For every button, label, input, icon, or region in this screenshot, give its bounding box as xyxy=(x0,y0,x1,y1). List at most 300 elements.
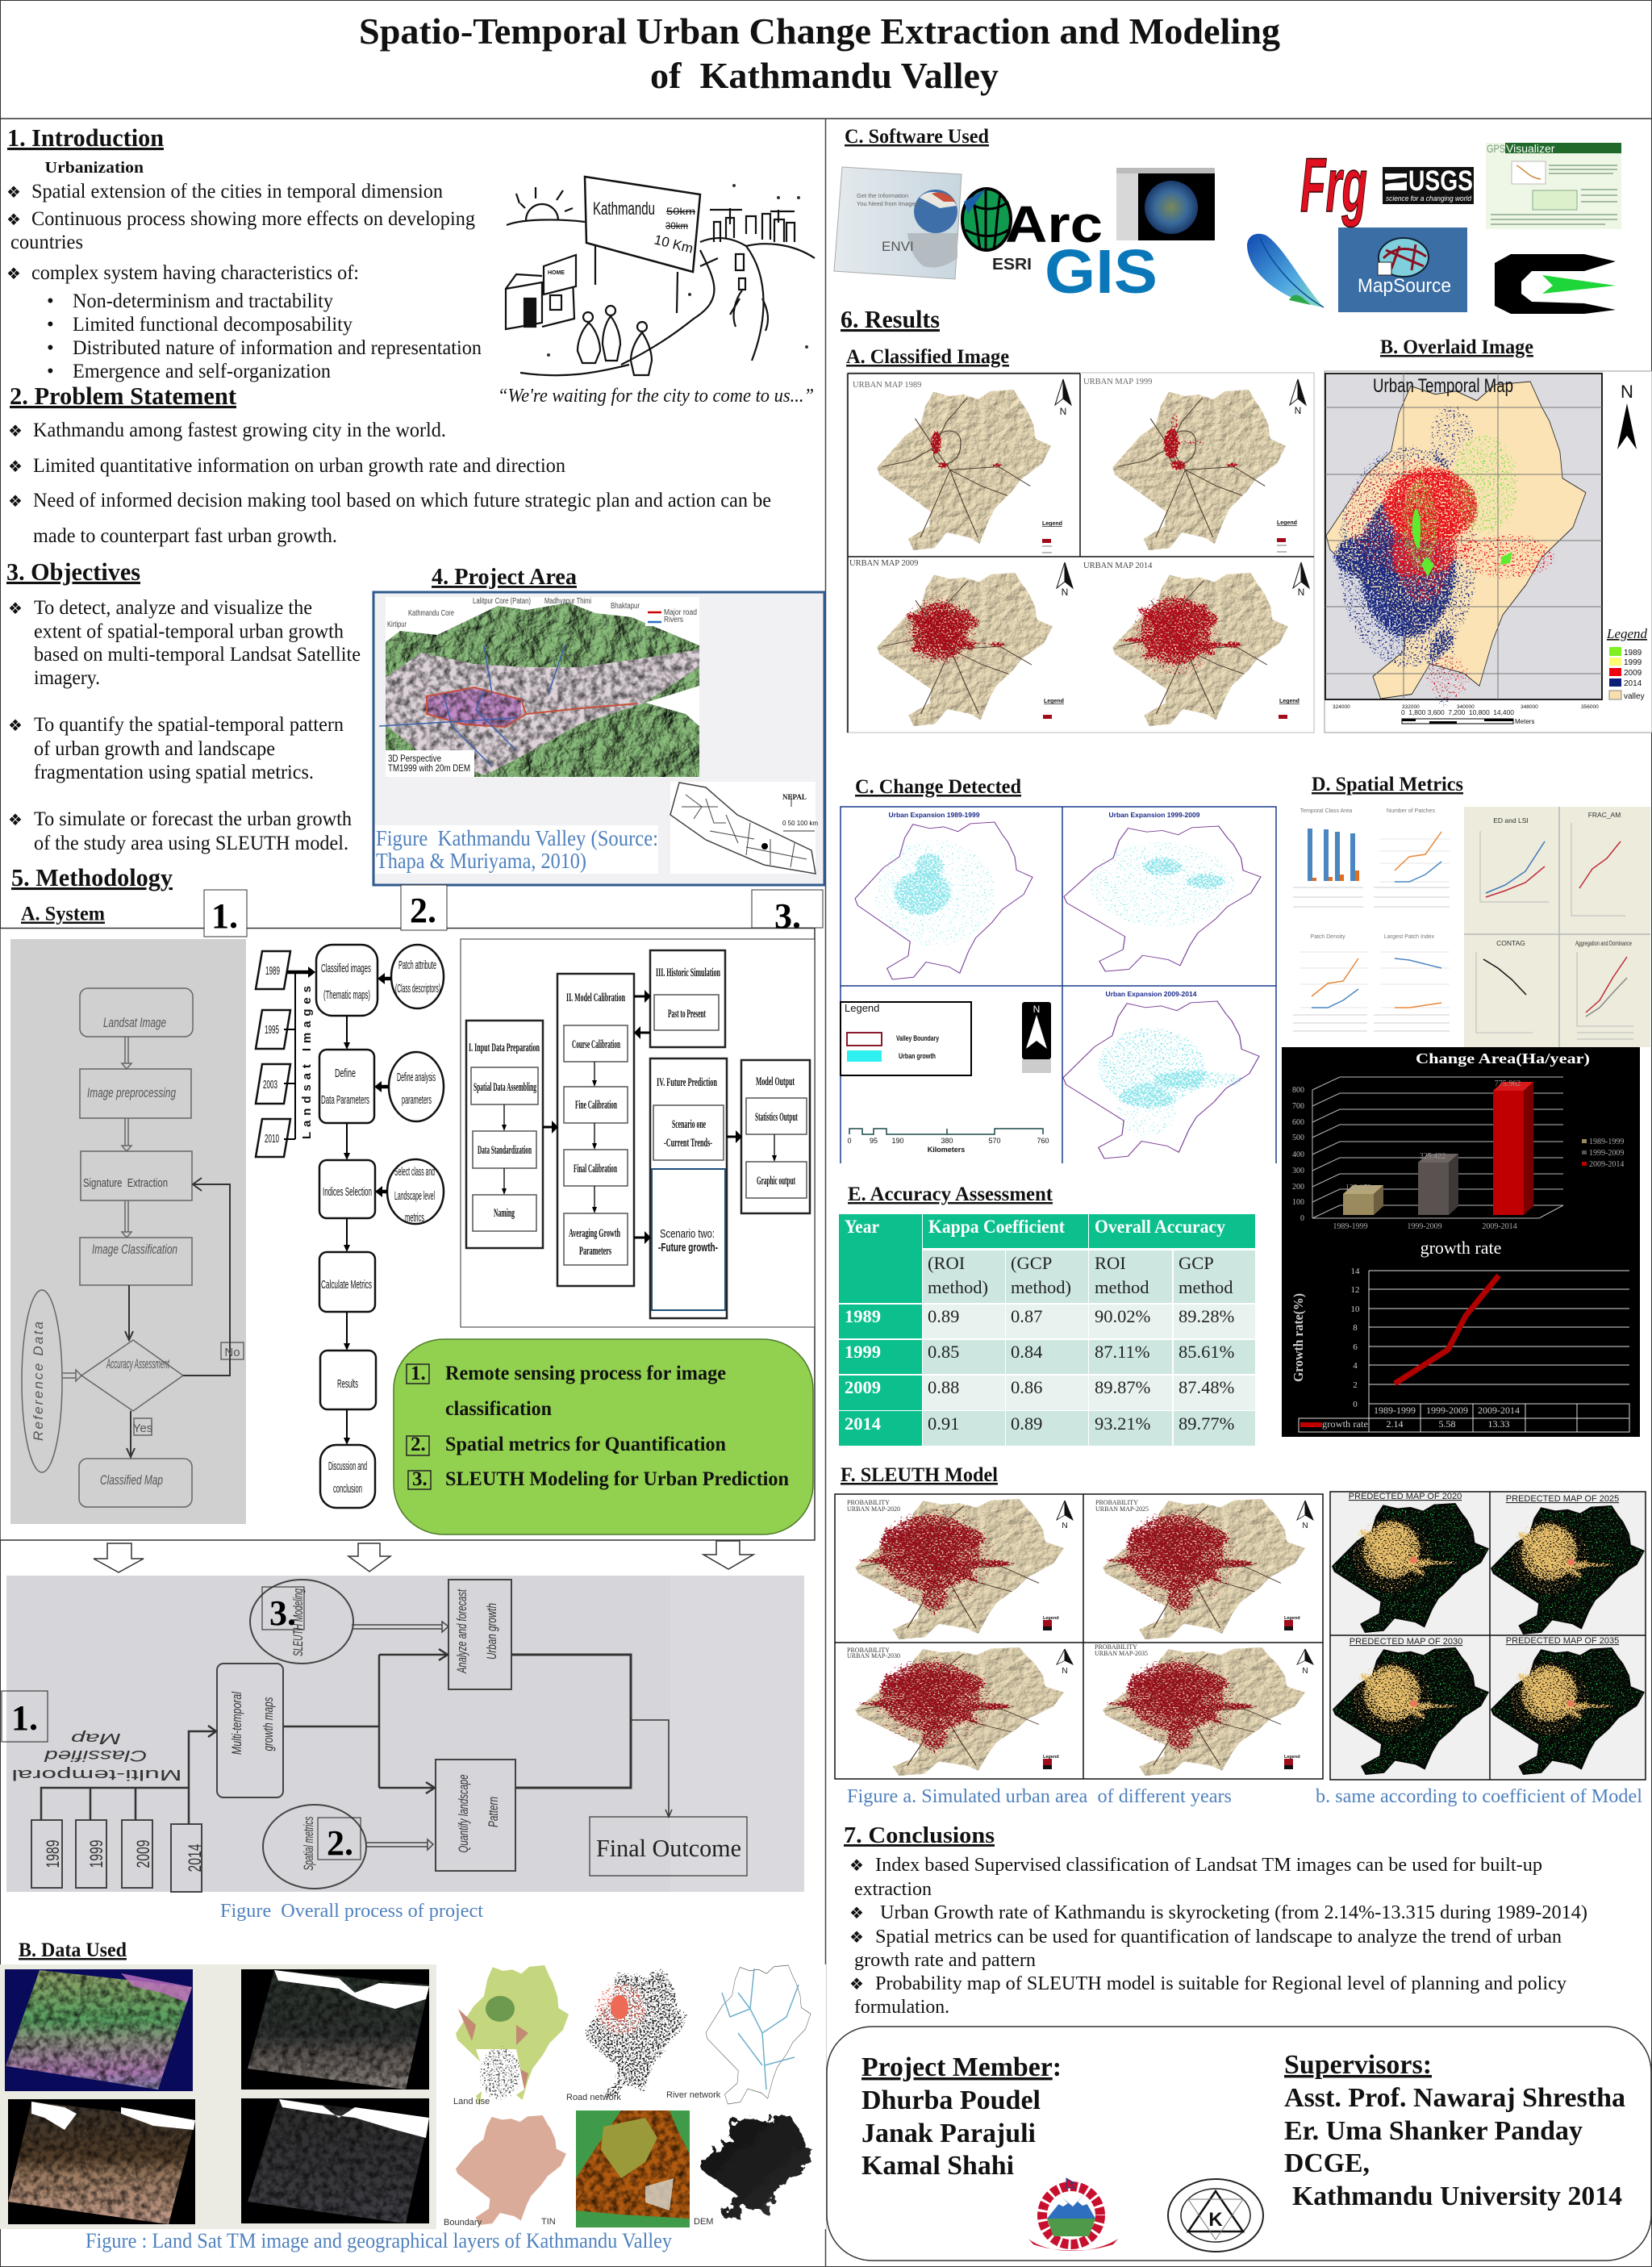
logo: ArcGIS: ESRI xyxy=(992,256,1032,273)
legend: change area: 1999-2009 xyxy=(1589,1149,1624,1158)
map: expansion 1999-2009: Urban Expansion 1999-2009 xyxy=(1109,811,1200,819)
callout: three methods: Remote sensing process for image xyxy=(445,1363,726,1384)
panel: project area frame xyxy=(373,592,824,885)
map: urban 2014: Legend xyxy=(1279,699,1299,704)
table: accuracy assessment: Year xyxy=(845,1217,879,1237)
map: urban 1989: URBAN MAP 1989 xyxy=(853,381,921,390)
map: probability 2020: URBAN MAP-2020 xyxy=(847,1505,900,1513)
scale bar: 348000 xyxy=(1521,704,1538,710)
data table: growth rate: growth rate xyxy=(1322,1418,1368,1430)
icon: Kathmandu University seal: K xyxy=(1208,2209,1223,2231)
flowchart: SLEUTH modeling: II. Model Calibration xyxy=(566,992,625,1004)
title banner xyxy=(0,10,1652,119)
section: project area xyxy=(373,565,824,885)
map: urban 1989: Legend xyxy=(1042,521,1062,527)
flowchart: spatial metrics: Discussion and xyxy=(328,1459,367,1473)
numbered marker boxes: 3. xyxy=(774,896,801,936)
flowchart: image classification: Image Classification xyxy=(92,1242,177,1257)
map: boundary xyxy=(444,2115,566,2227)
logo: GPS Visualizer page xyxy=(1486,142,1621,229)
logo: USGS xyxy=(1383,165,1474,204)
scale bar: kilometers: 95 xyxy=(870,1137,878,1145)
callout: three methods: Spatial metrics for Quantification xyxy=(445,1434,726,1455)
legend: overlay years: valley xyxy=(1624,692,1645,701)
chart: change area: 2009-2014 xyxy=(1482,1222,1517,1231)
introduction bullets: • xyxy=(47,290,54,312)
problem statement bullets: Limited quantitative information on urban growth rate and direction xyxy=(33,455,565,477)
bar: 2009-2014: 775.962 xyxy=(1495,1079,1521,1088)
conclusions bullets: ❖ xyxy=(849,1903,864,1923)
image: 3D valley perspective: Major road xyxy=(664,608,697,617)
flowchart: spatial metrics: Select class and xyxy=(394,1165,435,1179)
heading: change detected: C. Change Detected xyxy=(855,776,1021,798)
legend: overlay years: 2009 xyxy=(1624,669,1642,678)
objectives bullets: extent of spatial-temporal urban growth xyxy=(34,621,344,642)
flowchart: spatial metrics: Indices Selection xyxy=(323,1185,372,1199)
image: 3D valley perspective xyxy=(379,597,699,777)
flowchart: image classification: No xyxy=(224,1346,240,1359)
map: urban 1999 xyxy=(1083,378,1306,552)
panel: change detected maps xyxy=(841,807,1276,1163)
flowchart: image classification xyxy=(10,939,246,1524)
map: urban 1989 xyxy=(853,379,1071,553)
objectives bullets: based on multi-temporal Landsat Satellite xyxy=(34,644,361,666)
callout: three methods: SLEUTH Modeling for Urban Prediction xyxy=(445,1468,789,1490)
table: accuracy assessment: 0.88 xyxy=(928,1377,959,1397)
legend: overlay years: 1989 xyxy=(1624,649,1642,658)
chart: change area: 100 xyxy=(1292,1198,1304,1207)
diagram: overall process: 1999 xyxy=(86,1839,106,1868)
data table: growth rate: 2009-2014 xyxy=(1478,1405,1520,1416)
flowchart: spatial metrics: 2003 xyxy=(263,1078,277,1092)
map: urban 1989: N xyxy=(1060,406,1066,417)
table: accuracy assessment: 87.11% xyxy=(1095,1342,1150,1362)
logo: GPS Visualizer page: GPS xyxy=(1487,142,1505,155)
introduction bullets: Limited functional decomposability xyxy=(73,314,353,336)
scale bar: 356000 xyxy=(1581,704,1599,710)
flowchart: SLEUTH modeling: Averaging Growth xyxy=(569,1227,620,1240)
chart: change area: Change Area(Ha/year) xyxy=(1416,1050,1590,1067)
flowchart: image classification: Signature Extraction xyxy=(83,1176,168,1190)
image: 3D valley perspective: Madhyapur Thimi xyxy=(544,597,591,606)
panel: urban temporal map: N xyxy=(1621,382,1633,402)
diagram: overall process: Urban growth xyxy=(484,1603,499,1660)
cartoon: waiting for the city: HOME xyxy=(548,270,565,276)
map: probability 2030: Legend xyxy=(1043,1755,1059,1760)
flowchart: image classification: Landsat Image xyxy=(103,1015,166,1030)
flowchart: SLEUTH modeling: Scenario two: xyxy=(660,1227,715,1241)
callout: three methods xyxy=(394,1339,813,1534)
chart: ED and LSI xyxy=(1480,816,1549,902)
logo: Frg: Frg xyxy=(1300,143,1367,228)
introduction bullets: complex system having characteristics of: xyxy=(31,262,359,284)
numbered marker boxes: 2. xyxy=(410,891,436,930)
flowchart: SLEUTH modeling: Spatial Data Assembling xyxy=(473,1081,536,1094)
panel: probability maps xyxy=(835,1494,1323,1779)
map: predicted 2035 xyxy=(1491,1636,1645,1775)
chart: change area: 1989-1999 xyxy=(1333,1222,1368,1231)
map: urban 2009: N xyxy=(1062,587,1068,598)
panel: methodology frame xyxy=(0,928,815,1540)
bar: 1989-1999: 125.172 xyxy=(1345,1184,1371,1192)
flowchart: SLEUTH modeling: Past to Present xyxy=(668,1008,706,1021)
chart: ED and LSI: ED and LSI xyxy=(1493,816,1529,825)
map: probability 2020: Legend xyxy=(1043,1616,1059,1621)
legend: change detected xyxy=(841,1002,971,1075)
cartoon: waiting for the city: 50km xyxy=(666,206,695,217)
flowchart: spatial metrics: Define xyxy=(335,1067,356,1080)
column divider xyxy=(824,119,826,2267)
map: probability 2035: PROBABILITY xyxy=(1095,1643,1137,1651)
text: supervisors: Asst. Prof. Nawaraj Shrestha xyxy=(1284,2083,1625,2113)
heading: problem statement: 2. Problem Statement xyxy=(10,382,237,410)
heading: results: 6. Results xyxy=(841,305,940,333)
map: urban 2009: Legend xyxy=(1044,699,1064,704)
legend: overlay years xyxy=(1606,626,1648,701)
scale bar: 332000 xyxy=(1402,704,1420,710)
diagram: overall process: growth maps xyxy=(261,1697,276,1751)
table: accuracy assessment: method) xyxy=(1011,1277,1071,1297)
conclusions bullets: Probability map of SLEUTH model is suitable for Regional level of planning and policy xyxy=(875,1973,1567,1994)
map: probability 2025: PROBABILITY xyxy=(1095,1499,1138,1506)
numbered marker boxes xyxy=(204,885,823,937)
chart: number of patches xyxy=(1374,808,1450,907)
table: accuracy assessment: (ROI xyxy=(928,1253,965,1273)
map: probability 2035: N xyxy=(1302,1667,1308,1676)
table: accuracy assessment: 1989 xyxy=(845,1306,881,1326)
chart: FRAC_AM xyxy=(1571,811,1625,916)
callout: three methods: 3. xyxy=(412,1468,428,1490)
scale bar: kilometers: 0 xyxy=(847,1137,852,1145)
text: supervisors: Er. Uma Shanker Panday xyxy=(1284,2116,1583,2146)
logo: ENVI: Get the Information xyxy=(857,192,908,199)
legend: change detected: Valley Boundary xyxy=(896,1034,939,1042)
table: accuracy assessment: method) xyxy=(928,1277,988,1297)
table: accuracy assessment xyxy=(839,1214,1255,1446)
chart: change area: 600 xyxy=(1292,1118,1304,1127)
map: predicted 2020 xyxy=(1332,1492,1489,1633)
conclusions bullets: formulation. xyxy=(854,1996,949,2018)
logo: C arrow xyxy=(1495,254,1616,314)
scale bar: Meters xyxy=(1515,718,1534,725)
chart: aggregation and dominance xyxy=(1575,939,1633,1039)
flowchart: spatial metrics: Landsat Images xyxy=(300,986,314,1139)
table: accuracy assessment: 0.86 xyxy=(1011,1377,1042,1397)
chart: temporal class area xyxy=(1285,804,1370,924)
text: supervisors xyxy=(1284,2050,1625,2211)
introduction bullets: Distributed nature of information and representation xyxy=(73,337,482,359)
problem statement bullets: ❖ xyxy=(8,457,23,476)
introduction bullets: ❖ xyxy=(6,264,21,283)
image: 3D valley perspective: TM1999 with 20m DEM xyxy=(388,764,470,774)
images: Landsat scenes xyxy=(0,1964,436,2229)
map: urban 2014: URBAN MAP 2014 xyxy=(1083,562,1153,570)
map: TIN xyxy=(541,2110,690,2227)
conclusions bullets: Index based Supervised classification of Landsat TM images can be used for built-up xyxy=(875,1854,1542,1876)
objectives bullets: of urban growth and landscape xyxy=(34,738,275,760)
map: probability 2020: N xyxy=(1062,1522,1068,1530)
flowchart: image classification: Classified Map xyxy=(100,1472,163,1488)
objectives bullets xyxy=(8,597,361,854)
chart: growth rate: 12 xyxy=(1350,1285,1360,1295)
flowchart: SLEUTH modeling: Scenario one xyxy=(672,1118,706,1131)
flowchart: SLEUTH modeling: Parameters xyxy=(579,1245,611,1258)
flowchart: image classification: Reference Data xyxy=(31,1321,46,1441)
map: probability 2025: Legend xyxy=(1284,1616,1300,1621)
chart: growth rate: 14 xyxy=(1350,1267,1360,1276)
chart: growth rate: 2 xyxy=(1353,1380,1358,1390)
table: accuracy assessment: 0.87 xyxy=(1011,1306,1042,1326)
logo: MapSource: MapSource xyxy=(1358,275,1451,297)
map: Nepal inset xyxy=(670,782,818,874)
legend: change area xyxy=(1582,1138,1624,1169)
diagram: overall process: Pattern xyxy=(486,1797,501,1827)
heading: project area: 4. Project Area xyxy=(432,565,577,590)
callout: three methods: 1. xyxy=(411,1363,426,1384)
flowchart: spatial metrics: conclusion xyxy=(333,1482,362,1496)
logo: GPS Visualizer page: Visualizer xyxy=(1506,142,1555,155)
scale bar: kilometers: 760 xyxy=(1037,1137,1049,1145)
diagram: overall process: Final Outcome xyxy=(596,1834,741,1862)
numbered marker boxes: 1. xyxy=(211,896,238,936)
scale bar: 340000 xyxy=(1457,704,1475,710)
legend: change area: 1989-1999 xyxy=(1589,1138,1624,1146)
arrow: down 1 xyxy=(94,1543,144,1572)
bar: 1989-1999 xyxy=(1343,1184,1383,1215)
heading: data used: B. Data Used xyxy=(19,1939,127,1961)
icon: Kathmandu University seal xyxy=(1168,2179,1263,2252)
panel: predicted maps xyxy=(1330,1492,1646,1780)
chart: temporal class area: Temporal Class Area xyxy=(1300,808,1352,814)
objectives bullets: ❖ xyxy=(8,599,23,618)
diagram: overall process: Multi-temporal xyxy=(229,1691,244,1755)
table: accuracy assessment: 2009 xyxy=(845,1377,881,1397)
flowchart: spatial metrics: Landscape level xyxy=(394,1189,435,1203)
caption: Kathmandu Valley figure: Figure Kathmandu Valley (Source: xyxy=(376,826,658,850)
image: 3D valley perspective: Kathmandu Core xyxy=(408,609,454,618)
map: urban 1999: Legend xyxy=(1277,520,1297,526)
flowchart: image classification: Yes xyxy=(133,1422,152,1435)
table: accuracy assessment: (GCP xyxy=(1011,1253,1052,1273)
table: accuracy assessment: 0.85 xyxy=(928,1342,959,1362)
chart: growth rate: 4 xyxy=(1353,1361,1358,1371)
diagram: overall process: 2009 xyxy=(133,1839,153,1868)
chart: change area: 800 xyxy=(1292,1086,1304,1095)
text: supervisors: Supervisors: xyxy=(1284,2050,1432,2080)
icon: Nepal emblem xyxy=(1028,2178,1118,2251)
urban growth overlay xyxy=(1331,403,1557,710)
flowchart: spatial metrics: 1989 xyxy=(265,964,280,978)
conclusions bullets: ❖ xyxy=(849,1927,864,1947)
heading: conclusions: 7. Conclusions xyxy=(844,1822,995,1848)
map: urban 2009: URBAN MAP 2009 xyxy=(849,559,918,568)
logo: USGS: USGS xyxy=(1408,165,1473,197)
problem statement bullets: made to counterpart fast urban growth. xyxy=(33,525,337,547)
section: problem statement xyxy=(8,382,771,547)
diagram: overall process: Map xyxy=(71,1731,121,1747)
text: project members: Janak Parajuli xyxy=(861,2119,1036,2148)
flowchart: SLEUTH modeling: III. Historic Simulation xyxy=(656,967,720,979)
map: land use: Land use xyxy=(453,2097,490,2106)
data table: growth rate: 5.58 xyxy=(1439,1418,1455,1430)
north arrow: change detected: N xyxy=(1033,1004,1040,1015)
scale bar: kilometers: 570 xyxy=(988,1137,1001,1145)
bar: 1999-2009 xyxy=(1418,1152,1458,1215)
image: 3D valley perspective: Lalitpur Core (Patan) xyxy=(473,597,531,606)
map: probability 2030: URBAN MAP-2030 xyxy=(847,1652,900,1660)
cartoon: waiting for the city: 10 Km xyxy=(653,232,695,257)
data table: growth rate xyxy=(1299,1404,1629,1432)
diagram: overall process: 2. xyxy=(327,1823,353,1863)
legend: overlay years: Legend xyxy=(1606,626,1648,641)
diagram: overall process: SLEUTH Modeling xyxy=(290,1589,306,1656)
legend: change detected: Legend xyxy=(845,1002,879,1014)
flowchart: SLEUTH modeling: Graphic output xyxy=(757,1175,795,1188)
flowchart: SLEUTH modeling: Naming xyxy=(494,1207,515,1220)
data table: growth rate: 1989-1999 xyxy=(1374,1405,1416,1416)
legend: overlay years: 2014 xyxy=(1624,679,1642,688)
table: accuracy assessment: 0.84 xyxy=(1011,1342,1042,1362)
caption: Kathmandu Valley figure xyxy=(375,825,658,874)
heading: classified image: A. Classified Image xyxy=(846,346,1009,368)
heading: software used: C. Software Used xyxy=(845,126,989,148)
map: probability 2025: N xyxy=(1302,1522,1308,1530)
table: accuracy assessment: 89.28% xyxy=(1179,1306,1234,1326)
diagram: overall process: 2014 xyxy=(185,1844,205,1872)
table: accuracy assessment: 89.87% xyxy=(1095,1377,1150,1397)
cartoon: waiting for the city: 30km xyxy=(665,220,688,232)
heading: introduction: 1. Introduction xyxy=(7,123,164,152)
map: predicted 2035: PREDECTED MAP OF 2035 xyxy=(1506,1636,1619,1646)
table: accuracy assessment: 90.02% xyxy=(1095,1306,1150,1326)
objectives bullets: To simulate or forecast the urban growth xyxy=(34,808,352,830)
flowchart: spatial metrics: (Thematic maps) xyxy=(323,988,370,1002)
text: supervisors: DCGE, xyxy=(1284,2148,1370,2178)
objectives bullets: ❖ xyxy=(8,716,23,735)
section: software used xyxy=(834,126,1621,314)
problem statement bullets: Need of informed decision making tool based on which future strategic plan and action can be xyxy=(33,490,771,511)
diagram: overall process: Classified xyxy=(43,1747,147,1764)
introduction bullets: • xyxy=(47,337,54,359)
diagram: overall process: Spatial metrics xyxy=(301,1816,316,1870)
logo: ENVI xyxy=(834,167,962,279)
logo: ArcGIS: Arc xyxy=(1005,195,1103,253)
conclusions bullets: ❖ xyxy=(849,1856,864,1875)
scale bar: kilometers: 190 xyxy=(891,1137,904,1145)
map: Nepal inset: NEPAL xyxy=(782,793,807,801)
map: expansion 2009-2014 xyxy=(1063,990,1259,1159)
heading: spatial metrics: D. Spatial Metrics xyxy=(1312,774,1463,795)
objectives bullets: of the study area using SLEUTH model. xyxy=(34,833,348,854)
objectives bullets: fragmentation using spatial metrics. xyxy=(34,762,314,783)
introduction bullets: Non-determinism and tractability xyxy=(73,290,333,312)
chart: largest patch index: Largest Patch Index xyxy=(1384,934,1435,940)
table: accuracy assessment: Kappa Coefficient xyxy=(928,1217,1065,1237)
introduction bullets: Continuous process showing more effects on developing xyxy=(31,208,475,230)
heading: objectives: 3. Objectives xyxy=(6,557,140,586)
introduction bullets: • xyxy=(47,361,54,382)
diagram: overall process: Multi-temporal xyxy=(11,1767,182,1783)
logo: MapSource xyxy=(1338,228,1467,312)
chart: change area: 700 xyxy=(1292,1102,1304,1111)
map: expansion 1989-1999 xyxy=(855,811,1032,979)
conclusions bullets: Urban Growth rate of Kathmandu is skyrocketing (from 2.14%-13.315 during 1989-2014) xyxy=(880,1902,1587,1923)
chart: change area xyxy=(1292,1050,1624,1231)
panel: urban temporal map xyxy=(1325,371,1652,733)
cartoon: waiting for the city: “We're waiting for the city to come to us...” xyxy=(498,386,814,407)
map: DEM xyxy=(694,2115,815,2227)
flowchart: image classification: Image preprocessing xyxy=(87,1085,176,1100)
diagram: overall process: 3. xyxy=(269,1593,296,1633)
chart: growth rate: 6 xyxy=(1353,1342,1358,1352)
scale bar: kilometers: 380 xyxy=(941,1137,953,1145)
scale bar xyxy=(1333,704,1599,725)
text: supervisors: Kathmandu University 2014 xyxy=(1292,2181,1622,2211)
logo: ENVI: ENVI xyxy=(882,239,914,254)
objectives bullets: To quantify the spatial-temporal pattern xyxy=(34,714,344,736)
conclusions bullets: Spatial metrics can be used for quantification of landscape to analyze the trend of urban xyxy=(875,1926,1562,1948)
introduction bullets: countries xyxy=(10,232,83,253)
scale bar: kilometers: Kilometers xyxy=(928,1146,965,1154)
chart: CONTAG: CONTAG xyxy=(1496,939,1525,947)
table: accuracy assessment: ROI xyxy=(1095,1253,1126,1273)
legend: change area: 2009-2014 xyxy=(1589,1160,1624,1169)
map: probability 2035 xyxy=(1095,1643,1313,1776)
map: probability 2030 xyxy=(847,1647,1073,1776)
table: accuracy assessment: method xyxy=(1179,1277,1233,1297)
flowchart: SLEUTH modeling: -Current Trends- xyxy=(664,1137,712,1150)
panel: change area and growth rate charts xyxy=(1282,1047,1640,1437)
diagram: overall process: 1. xyxy=(11,1698,38,1738)
logo: USGS: science for a changing world xyxy=(1386,194,1472,203)
legend: overlay years: 1999 xyxy=(1624,658,1642,667)
table: accuracy assessment: 1999 xyxy=(845,1342,881,1362)
panel: spatial metrics charts xyxy=(1285,804,1650,1047)
problem statement bullets: ❖ xyxy=(8,491,23,511)
panel: classified maps xyxy=(847,373,1314,733)
subheading: urbanization: Urbanization xyxy=(45,159,144,177)
caption: coefficient of model: b. same according to coefficient of Model xyxy=(1316,1785,1642,1807)
table: accuracy assessment: 85.61% xyxy=(1179,1342,1234,1362)
flowchart: spatial metrics: metrics xyxy=(405,1211,424,1225)
map: predicted 2025 xyxy=(1491,1494,1645,1634)
chart: change area: 0 xyxy=(1300,1214,1304,1223)
section: introduction xyxy=(6,123,482,382)
north arrow: change detected xyxy=(1022,1002,1051,1073)
conclusions bullets: extraction xyxy=(854,1878,932,1900)
heading: SLEUTH model: F. SLEUTH Model xyxy=(841,1464,998,1486)
bar: 2009-2014 xyxy=(1493,1079,1533,1215)
map: TIN: TIN xyxy=(541,2217,556,2227)
introduction bullets: • xyxy=(47,314,54,336)
arrow: down 2 xyxy=(348,1543,390,1572)
chart: change area: 300 xyxy=(1292,1167,1304,1175)
flowchart: SLEUTH modeling: I. Input Data Preparation xyxy=(469,1042,540,1054)
objectives bullets: To detect, analyze and visualize the xyxy=(34,597,312,619)
text: project members: Kamal Shahi xyxy=(861,2151,1014,2181)
logo: ArcGIS: GIS xyxy=(1045,237,1158,307)
logo: Photoshop feather xyxy=(1247,234,1324,307)
map: river network: River network xyxy=(666,2090,721,2100)
map: predicted 2030: PREDECTED MAP OF 2030 xyxy=(1350,1637,1462,1647)
flowchart: SLEUTH modeling: Final Calibration xyxy=(574,1163,617,1175)
chart: change area: 400 xyxy=(1292,1150,1304,1159)
flowchart: SLEUTH modeling: Statistics Output xyxy=(755,1111,798,1124)
table: accuracy assessment: 0.89 xyxy=(928,1306,959,1326)
table: accuracy assessment: 2014 xyxy=(845,1413,881,1434)
map: urban 2014: N xyxy=(1298,587,1304,598)
data table: growth rate: 2.14 xyxy=(1386,1418,1404,1430)
